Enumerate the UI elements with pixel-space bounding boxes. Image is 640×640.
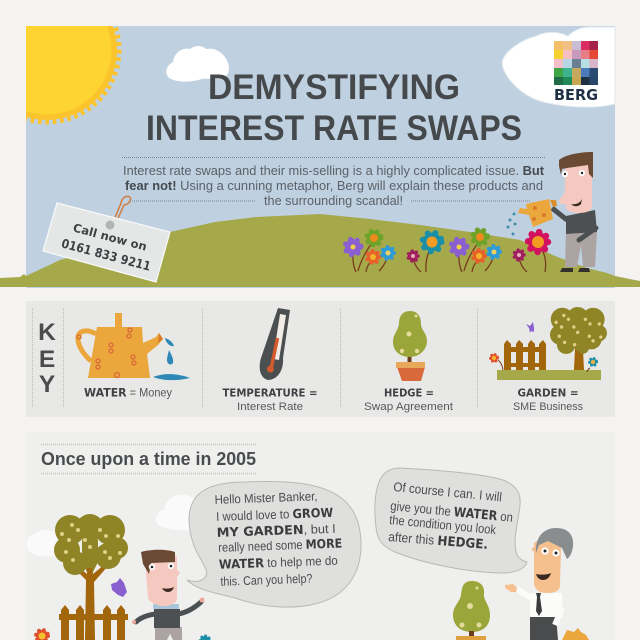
icon: hedge: Swap Agreement — [364, 401, 453, 413]
speech bubble: customer: this. Can you help? — [220, 572, 313, 589]
icon: garden: SME Business — [513, 401, 583, 413]
key heading: Y — [39, 371, 55, 398]
panel: story — [26, 432, 615, 640]
call now tag: 0161 833 9211 — [60, 236, 153, 274]
speech bubble: banker: the condition you look — [389, 512, 497, 537]
icon: thermometer: Interest Rate — [237, 401, 303, 413]
intro text: Interest rate swaps and their mis-selling is a highly complicated issue. But — [123, 164, 545, 178]
panel: key — [26, 301, 615, 417]
banker — [505, 528, 589, 640]
man with garden — [132, 550, 204, 640]
key heading: K — [38, 319, 56, 346]
speech bubble: customer: I would love to GROW — [216, 505, 334, 524]
key heading: E — [39, 346, 55, 373]
call now tag: Call now on — [72, 221, 149, 254]
icon: sun — [26, 26, 122, 124]
flowers — [345, 230, 548, 272]
icon: thermometer: TEMPERATURE = — [222, 388, 318, 400]
heading: Once upon a time in 2005 — [41, 448, 256, 469]
panel: header — [0, 0, 640, 288]
man watering — [552, 152, 597, 272]
logo cloud: BERG — [554, 86, 598, 104]
icon: hedge — [364, 311, 453, 413]
tree and fence — [36, 514, 210, 640]
title — [146, 68, 522, 148]
speech bubble: customer: really need some MORE — [218, 535, 342, 555]
intro text: fear not! Using a cunning metaphor, Berg will explain these products and — [125, 179, 543, 193]
speech bubble: banker: after this HEDGE. — [388, 529, 489, 553]
speech bubble: banker: give you the WATER on — [390, 498, 514, 526]
speech bubble: customer: MY GARDEN, but I — [216, 521, 336, 540]
icon: hedge: HEDGE = — [384, 388, 434, 400]
title: INTEREST RATE SWAPS — [146, 109, 522, 148]
icon: header watering can — [506, 199, 557, 236]
hill — [0, 214, 640, 287]
call now tag — [43, 196, 170, 282]
title: DEMYSTIFYING — [208, 68, 460, 107]
icon: butterfly — [111, 578, 127, 597]
speech bubble: customer: Hello Mister Banker, — [214, 489, 318, 507]
key heading — [38, 319, 56, 398]
icon: garden — [490, 307, 607, 413]
icon: thermometer — [222, 308, 318, 413]
logo cloud — [502, 27, 615, 107]
icon: cloud — [166, 46, 229, 82]
intro text: the surrounding scandal! — [264, 194, 403, 208]
speech bubble: banker — [375, 468, 527, 573]
icon: garden: GARDEN = — [518, 388, 578, 400]
speech bubble: banker: Of course I can. I will — [393, 479, 503, 504]
icon: watering can: WATER = Money — [84, 386, 172, 400]
hedge in story — [453, 581, 490, 640]
clouds — [26, 495, 198, 557]
intro text — [122, 158, 545, 208]
icon: watering can — [77, 313, 190, 400]
speech bubble: customer — [187, 481, 361, 607]
speech bubble: customer: WATER to help me do — [219, 553, 338, 572]
